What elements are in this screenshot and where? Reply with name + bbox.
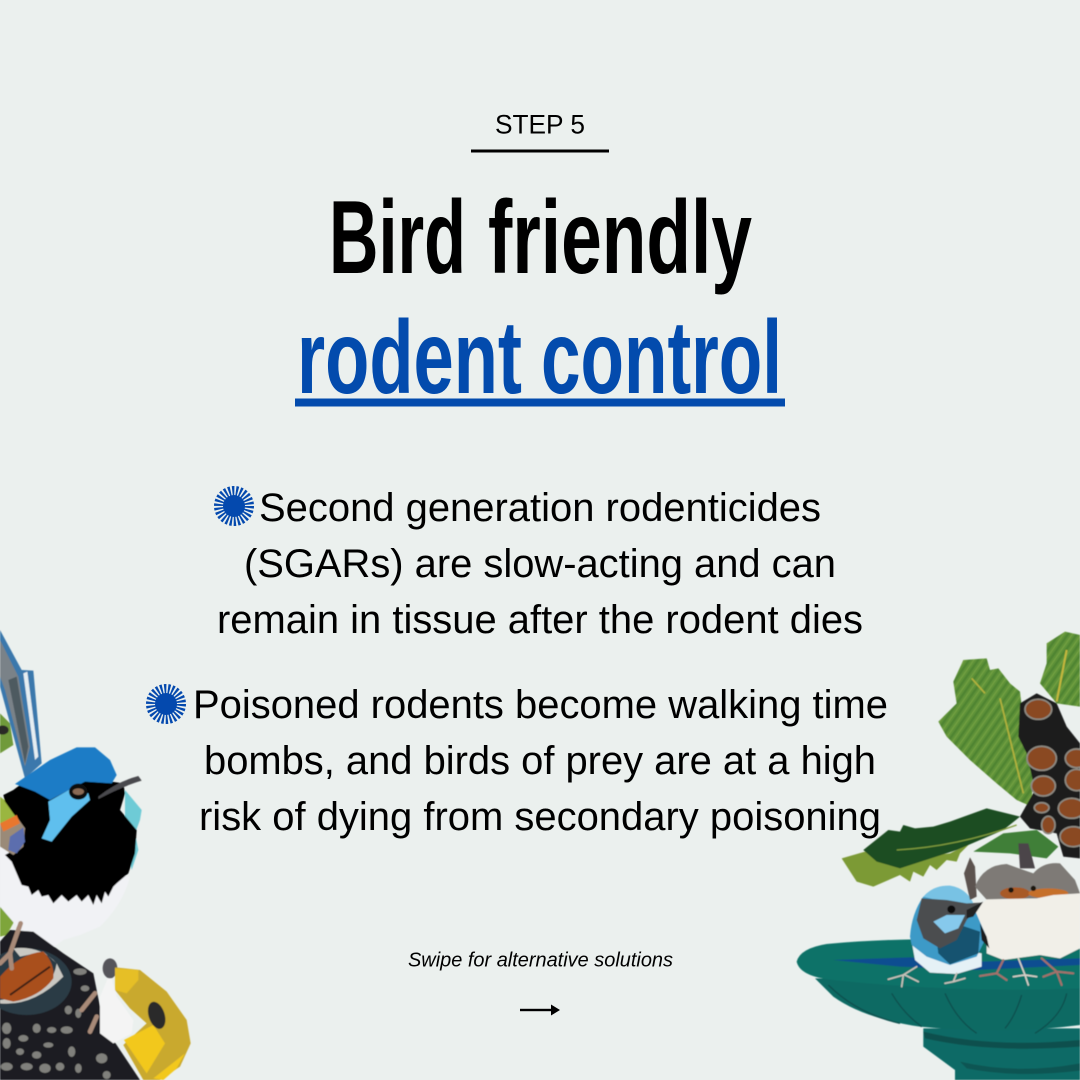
- bird bath rim: [797, 939, 1080, 990]
- male wren feet: [888, 967, 965, 987]
- banksia cone: [1018, 693, 1080, 858]
- bullet point: secondary poisoning: Poisoned rodents become walking time: [193, 683, 888, 727]
- male wren crown: [923, 886, 973, 907]
- bullet point: SGARs: Second generation rodenticides: [259, 486, 821, 530]
- bullet point: SGARs: [217, 486, 863, 642]
- title: control: [541, 300, 782, 416]
- male wren dark mask: [917, 898, 982, 948]
- wren cheek patch: [42, 788, 90, 842]
- cone seed pod: [0, 948, 72, 1015]
- icon: blue starburst bullet: [220, 492, 248, 520]
- male wren beak: [967, 902, 983, 918]
- female wren wing dark edge: [980, 923, 989, 948]
- banksia stem: [1018, 843, 1035, 868]
- title: rodent: [297, 300, 522, 416]
- female wrens white bodies: [975, 893, 1080, 960]
- female wrens orange faces: [1000, 886, 1068, 899]
- bird bath pedestal: [923, 1028, 1080, 1080]
- male wren eye: [947, 905, 955, 913]
- yellow wing: [115, 967, 191, 1080]
- title: Bird: [329, 180, 466, 296]
- bird bath water: [833, 957, 1080, 970]
- female wren feet: [980, 958, 1073, 985]
- bullet point: SGARs: remain in tissue after the rodent dies: [217, 598, 863, 642]
- step label: [471, 110, 609, 152]
- dark wing tip: [103, 958, 117, 978]
- step label: STEP 5: [495, 110, 585, 140]
- banksia leaves: [842, 632, 1080, 887]
- wren blue crown: [15, 747, 117, 800]
- bullet point: secondary poisoning: [152, 683, 888, 839]
- title: [295, 180, 785, 416]
- male wren cheek patch: [933, 915, 965, 933]
- cone spots: [1, 968, 111, 1079]
- wren throat highlight: [125, 790, 142, 870]
- banksia cone: [0, 930, 140, 1080]
- wing eye marking: [145, 1000, 169, 1031]
- swipe prompt: Swipe for alternative solutions: [408, 948, 673, 972]
- title: friendly: [488, 180, 752, 296]
- icon: blue starburst bullet: [152, 690, 180, 718]
- yellow feather highlights: [124, 1025, 165, 1073]
- bullet point: secondary poisoning: risk of dying from secondary poisoning: [199, 795, 881, 839]
- wing fragment: [0, 817, 25, 855]
- bullet point: SGARs: (SGARs) are slow-acting and can: [244, 542, 836, 586]
- leaf fragments: [0, 713, 18, 937]
- white-tipped wing: [100, 973, 133, 1043]
- wren feet: [0, 923, 97, 1032]
- male wren white belly: [912, 942, 982, 974]
- female wrens grey heads: [975, 863, 1080, 903]
- wren beak: [98, 776, 142, 799]
- wren tail: [0, 630, 42, 778]
- male wren body: [910, 897, 987, 965]
- arrow: [520, 1004, 560, 1016]
- wren black head: [3, 770, 137, 905]
- bullet point: secondary poisoning: bombs, and birds of prey are at a high: [204, 739, 876, 783]
- wren eye: [69, 784, 88, 800]
- illustration: right banksia and bird bath: [797, 632, 1080, 1080]
- wren white belly: [0, 847, 130, 950]
- bird bath bowl: [815, 978, 1080, 1030]
- female wren tail: [964, 857, 977, 900]
- illustration: left birds: [0, 630, 191, 1080]
